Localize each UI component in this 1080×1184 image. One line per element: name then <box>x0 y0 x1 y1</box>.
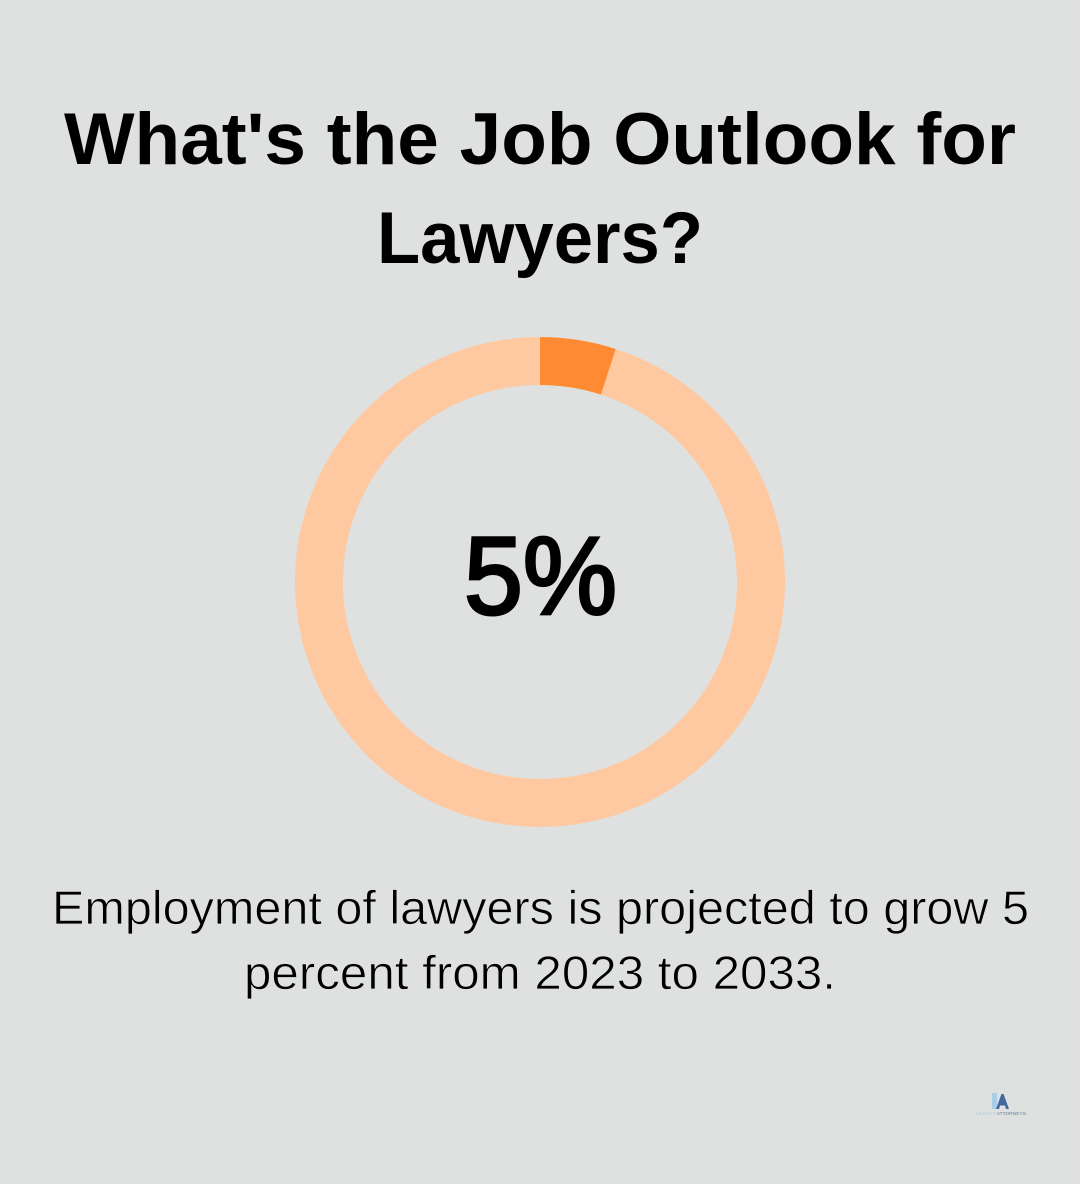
donut highlighted segment <box>540 337 616 395</box>
logo mark <box>992 1093 1009 1109</box>
donut track <box>319 361 761 803</box>
description text <box>52 881 1029 999</box>
description text: percent from 2023 to 2033. <box>244 946 836 999</box>
logo wordmark: LEGACY ATTORNEYS <box>976 1111 1026 1116</box>
donut chart: 5 percent <box>319 337 761 803</box>
title: Lawyers? <box>377 198 703 279</box>
title <box>64 99 1016 279</box>
logo <box>976 1093 1026 1116</box>
description text: Employment of lawyers is projected to grow 5 <box>52 881 1029 934</box>
title: What's the Job Outlook for <box>64 99 1016 180</box>
donut centre value: 5% <box>464 515 617 638</box>
